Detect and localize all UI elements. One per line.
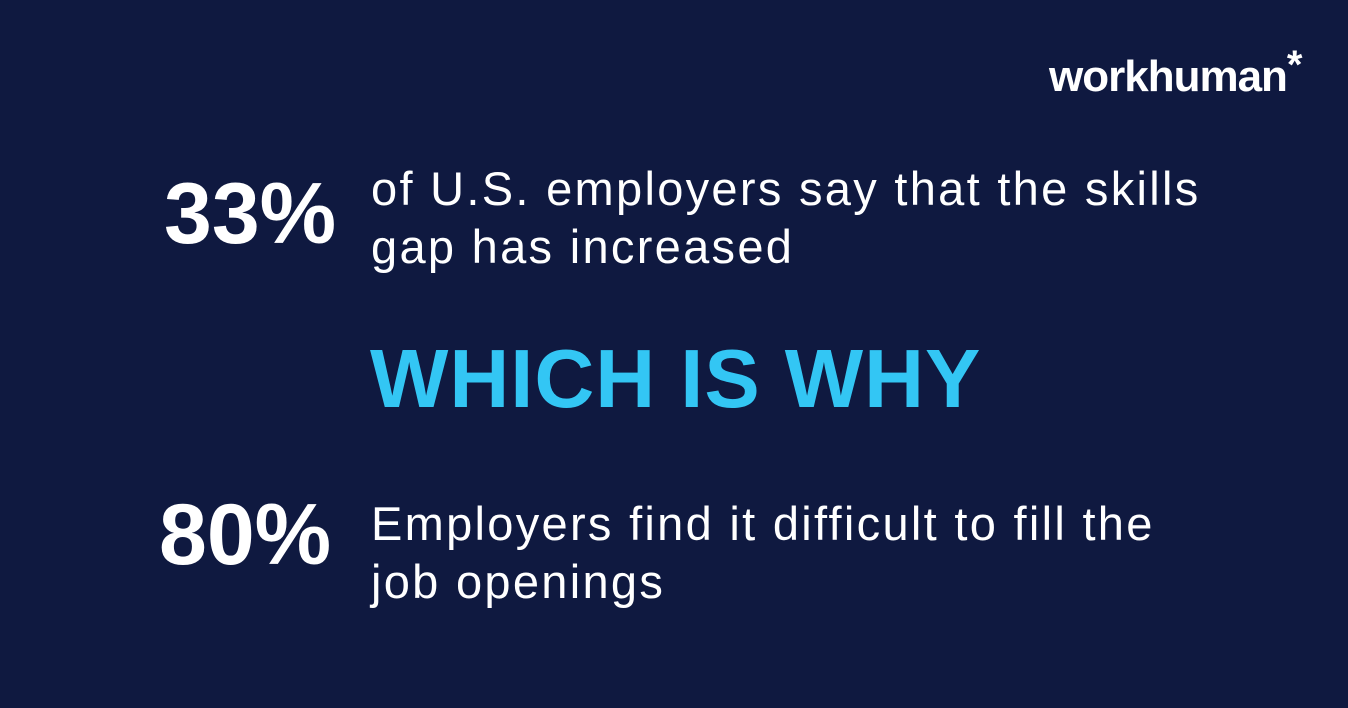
stat 1 text: of U.S. employers say that the skills bbox=[371, 162, 1201, 215]
heading: which is why: WHICH IS WHY bbox=[370, 332, 981, 425]
stat 2 text: job openings bbox=[371, 555, 665, 608]
stat 2 percentage: 80% bbox=[159, 487, 331, 583]
stat 2 text bbox=[370, 497, 1155, 608]
stat 2 text: Employers find it difficult to fill the bbox=[371, 497, 1155, 550]
logo: workhuman* bbox=[1049, 43, 1302, 101]
stat 1 text: gap has increased bbox=[371, 220, 794, 273]
stat 1 text bbox=[371, 162, 1201, 273]
stat 1 percentage: 33% bbox=[164, 166, 336, 262]
